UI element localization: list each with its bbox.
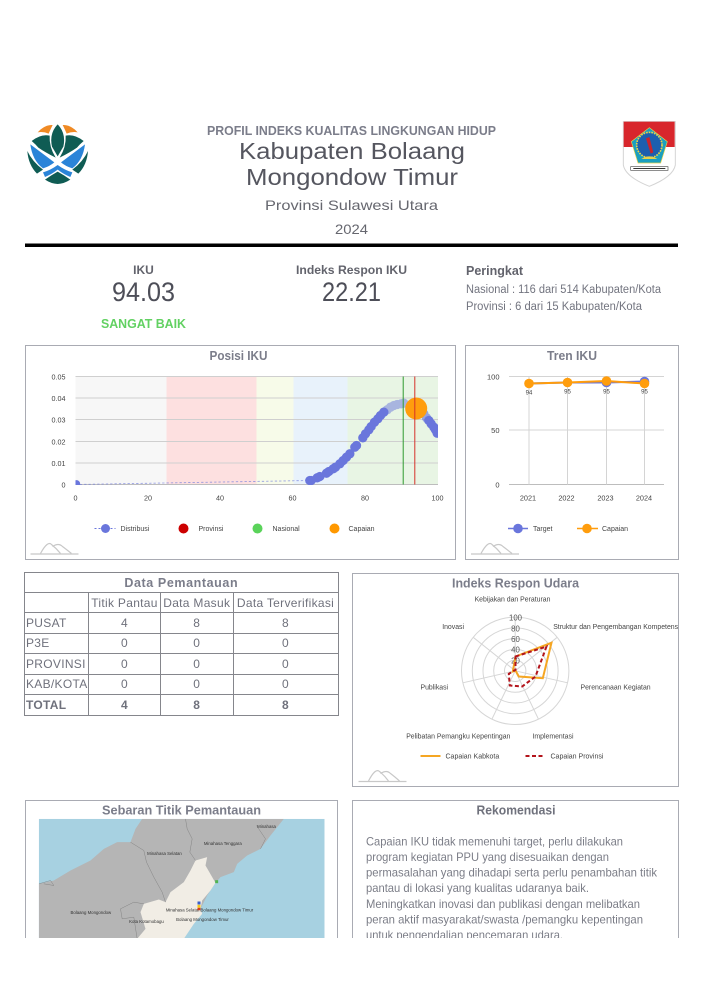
text: recommendation body: program kegiatan PPU yang disesuaikan dengan: [366, 850, 608, 864]
stat: IKU: IKU: [133, 263, 154, 277]
table: Data Pemantauan: 0: [193, 677, 200, 691]
icon: chart watermark: [471, 543, 519, 554]
map: monitoring locations: Bolaang Mongondow: [70, 909, 112, 914]
chart: radar grid: [461, 617, 568, 724]
chart: x axis labels: 2023: [597, 493, 614, 502]
heading: Indeks Respon Udara: Indeks Respon Udara: [452, 575, 579, 590]
map: monitoring locations: Kota Kotamobagu: [129, 918, 164, 923]
heading: regency name: Mongondow Timur: [246, 164, 458, 190]
logo: KLH emblem: [27, 124, 88, 184]
heading: profile title: PROFIL INDEKS KUALITAS LINGKUNGAN HIDUP: [207, 124, 496, 138]
legend: [508, 523, 628, 533]
panel: Tren IKU: [465, 344, 678, 560]
table: Data Pemantauan: P3E: [26, 636, 50, 650]
chart: radar scale labels: 100: [508, 613, 522, 622]
table: Data Pemantauan: 0: [282, 677, 289, 691]
text: year: 2024: [335, 222, 369, 237]
chart: x axis labels: [73, 493, 443, 502]
chart: capaian series: [524, 376, 649, 388]
stat: IKU: SANGAT BAIK: [101, 317, 186, 331]
chart: nasional marker line: [402, 376, 404, 484]
chart: y axis labels: 100: [487, 372, 500, 381]
map: monitoring locations: Bolaang Mongondow Timur: [200, 907, 253, 912]
chart: capaian point: [405, 397, 427, 419]
chart: y axis labels: [487, 372, 500, 489]
chart: x axis labels: 2021: [520, 493, 536, 502]
chart: y axis labels: [51, 372, 65, 489]
chart: radar axis labels: Struktur dan Pengembangan Kompetensi: [553, 624, 678, 630]
text: recommendation body: peran aktif masyarakat/swasta /pemangku kepentingan: [366, 912, 642, 926]
chart: x axis labels: 100: [431, 493, 443, 502]
legend: Capaian Kabkota: [445, 753, 499, 760]
panel: Rekomendasi: [352, 800, 679, 938]
legend: Capaian: [348, 526, 374, 532]
heading: Sebaran Titik Pemantauan: Sebaran Titik Pemantauan: [102, 802, 261, 817]
table: Data Pemantauan: Data Terverifikasi: [237, 596, 334, 610]
chart: y axis labels: 0.04: [51, 394, 65, 402]
chart: radar scale labels: 80: [511, 624, 520, 633]
stat: Indeks Respon IKU: 22.21: [322, 277, 381, 307]
text: recommendation body: [366, 834, 657, 942]
chart: capaian provinsi polygon: [508, 646, 546, 686]
chart: provinsi marker line: [413, 376, 415, 484]
table: Data Pemantauan: 0: [121, 636, 128, 650]
table: Data Pemantauan: Data Masuk: [163, 596, 230, 610]
panel: Sebaran Titik Pemantauan: [24, 800, 338, 938]
chart: radar scale labels: [508, 613, 522, 665]
chart: data labels: [526, 389, 648, 396]
icon: chart watermark: [30, 543, 78, 554]
chart: radar scale labels: 60: [511, 634, 520, 644]
header band: [25, 121, 678, 331]
heading: regency name: [239, 138, 465, 190]
chart: x axis labels: 20: [144, 493, 152, 502]
map: monitoring locations: Bolaang Mongondow Timur: [176, 916, 229, 921]
chart: x axis labels: 0: [73, 493, 77, 502]
table: Data Pemantauan: PROVINSI: [26, 657, 86, 671]
heading: regency name: Kabupaten Bolaang: [239, 138, 465, 164]
table: Data Pemantauan: Data Pemantauan: [124, 576, 238, 590]
stat: Indeks Respon IKU: [296, 263, 407, 307]
chart: x axis labels: 40: [216, 493, 224, 502]
chart: data labels: 95: [564, 389, 571, 395]
chart: radar axis labels: Pelibatan Pemangku Kepentingan: [406, 733, 510, 740]
table: Data Pemantauan: Titik Pantau: [91, 596, 158, 610]
table: Data Pemantauan: KAB/KOTA: [26, 677, 88, 691]
chart: y axis labels: 0: [495, 480, 500, 489]
table: Data Pemantauan: 8: [282, 698, 289, 712]
chart: y axis labels: 0.02: [51, 437, 65, 446]
chart: radar axis labels: Perencanaan Kegiatan: [580, 684, 650, 691]
table: Data Pemantauan: 8: [193, 616, 200, 630]
map: monitoring locations: Minahasa Tenggara: [203, 841, 242, 846]
text: recommendation body: pantau di lokasi yang kualitas udaranya baik.: [366, 881, 588, 895]
stat: IKU: [101, 263, 186, 331]
chart: data labels: 95: [641, 389, 648, 395]
table: Data Pemantauan: 0: [193, 636, 200, 650]
chart: radar axis labels: Publikasi: [420, 684, 448, 691]
legend: Distribusi: [120, 526, 149, 532]
heading: Rekomendasi: Rekomendasi: [476, 802, 555, 817]
map: monitoring locations: Minahasa Selatan: [147, 850, 182, 855]
stat: Peringkat: [466, 264, 662, 313]
chart: x axis labels: [520, 493, 652, 502]
legend: Nasional: [272, 526, 300, 532]
chart: data labels: 95: [603, 389, 610, 395]
table: Data Pemantauan: 4: [121, 616, 128, 630]
chart: x axis labels: 2024: [636, 493, 652, 502]
chart: x axis labels: 60: [288, 493, 296, 502]
chart: radar scale labels: 20: [511, 656, 520, 665]
map: monitoring locations: Minahasa Selatan: [165, 907, 201, 912]
map: monitoring locations: Minahasa: [257, 823, 276, 828]
table: Data Pemantauan: PUSAT: [26, 616, 67, 630]
table: Data Pemantauan: 0: [121, 657, 128, 671]
legend: Provinsi: [198, 526, 223, 532]
stat: Peringkat: Peringkat: [466, 264, 524, 278]
stat: Peringkat: Provinsi : 6 dari 15 Kabupaten/Kota: [466, 301, 643, 313]
stat: IKU: 94.03: [112, 277, 175, 307]
table: Data Pemantauan: 4: [121, 698, 128, 712]
table: Data Pemantauan: 0: [282, 636, 289, 650]
chart: distribution curve: [72, 398, 441, 487]
chart: radar scale labels: 40: [511, 645, 520, 654]
legend: Capaian Provinsi: [550, 753, 603, 760]
legend: Capaian: [602, 526, 628, 532]
map: monitoring locations: [38, 818, 324, 938]
legend: [420, 753, 603, 760]
text: province: Provinsi Sulawesi Utara: [265, 197, 438, 213]
logo: regency coat of arms: [623, 122, 675, 186]
table: Data Pemantauan: 0: [282, 657, 289, 671]
table: Data Pemantauan: 8: [193, 698, 200, 712]
text: recommendation body: Meningkatkan inovasi dan publikasi dengan melibatkan: [366, 896, 640, 910]
table: Data Pemantauan: TOTAL: [26, 698, 66, 712]
table: Data Pemantauan: 0: [193, 657, 200, 671]
panel: Indeks Respon Udara: [352, 572, 679, 787]
text: recommendation body: Capaian IKU tidak memenuhi target, perlu dilakukan: [366, 834, 622, 848]
stat: Indeks Respon IKU: Indeks Respon IKU: [296, 263, 407, 277]
chart: y axis labels: 0.01: [51, 458, 65, 468]
text: recommendation body: permasalahan yang dihadapi serta perlu penambahan titik: [366, 865, 657, 879]
chart: y axis labels: 0: [61, 480, 65, 489]
table: Data Pemantauan: [24, 572, 339, 716]
chart: radar axis labels: Kebijakan dan Peraturan: [474, 596, 550, 603]
chart: radar axis labels: [406, 596, 680, 740]
chart: capaian kabkota polygon: [512, 642, 551, 678]
chart: target series: [529, 376, 649, 387]
legend: Target: [533, 526, 553, 532]
icon: chart watermark: [358, 770, 406, 781]
heading: Tren IKU: Tren IKU: [547, 348, 597, 362]
panel: Posisi IKU: [24, 344, 456, 560]
table: Data Pemantauan: 0: [121, 677, 128, 691]
stat: Peringkat: Nasional : 116 dari 514 Kabupaten/Kota: [466, 284, 662, 296]
chart: y axis labels: 50: [491, 426, 500, 434]
chart: y axis labels: 0.03: [51, 415, 65, 424]
chart: radar axis labels: Implementasi: [532, 733, 573, 740]
chart: x axis labels: 2022: [558, 493, 575, 502]
table: Data Pemantauan: 8: [282, 616, 289, 630]
legend: [94, 523, 374, 533]
chart: y axis labels: 0.05: [51, 372, 65, 381]
chart: x axis labels: 80: [360, 493, 368, 502]
chart: category bands: [75, 376, 438, 484]
chart: data labels: 94: [526, 390, 533, 396]
chart: radar axis labels: Inovasi: [442, 624, 464, 630]
heading: Posisi IKU: Posisi IKU: [209, 348, 267, 362]
